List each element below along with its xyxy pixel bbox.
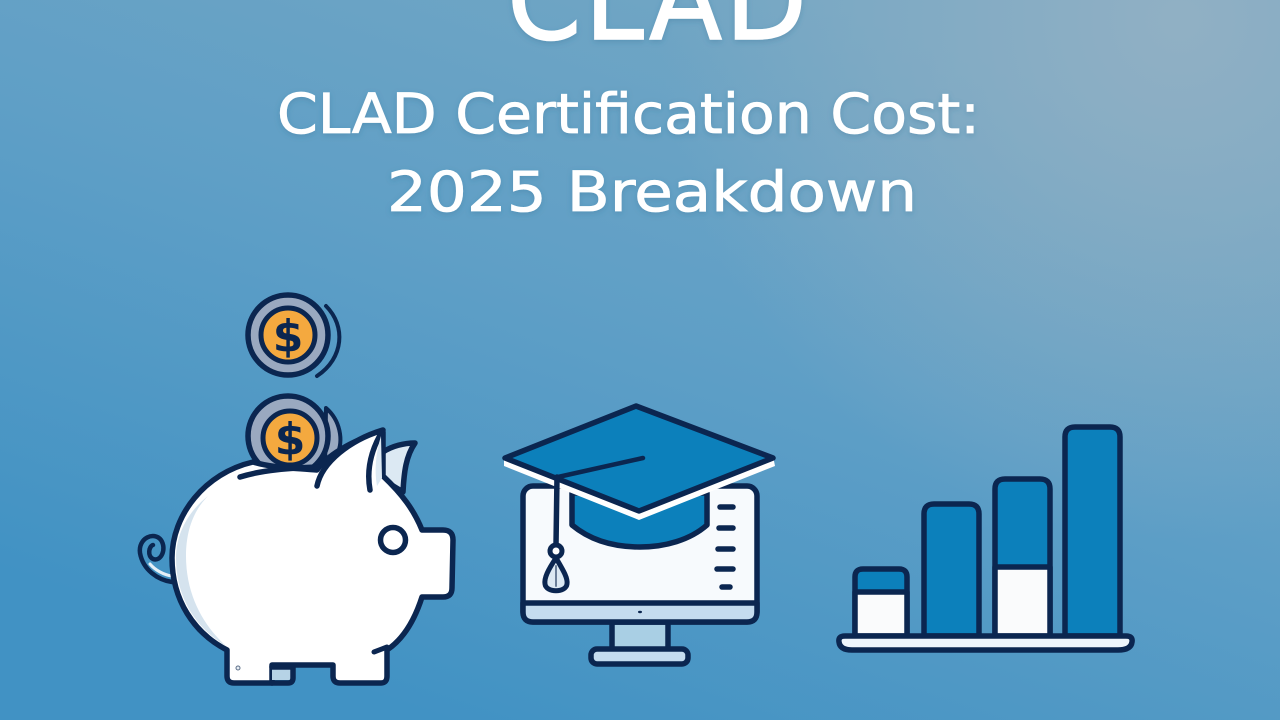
icon: falling coin xyxy=(248,295,339,376)
bar 3 xyxy=(995,479,1050,636)
subtitle xyxy=(277,82,980,224)
icon: cap base xyxy=(572,493,707,547)
bar 4 xyxy=(1065,427,1120,636)
subtitle: 2025 Breakdown xyxy=(387,160,917,224)
chart baseline shelf xyxy=(839,636,1132,650)
icon: near ear xyxy=(317,430,383,490)
icon: tassel xyxy=(545,477,567,591)
icon: pig tail xyxy=(140,536,172,582)
icon: monitor screen xyxy=(523,486,757,622)
icon: pig eye xyxy=(380,528,406,552)
icon: cap strap xyxy=(558,458,643,477)
icon: pig body xyxy=(172,432,453,683)
icon: coin entering slot xyxy=(248,396,340,476)
icon: monitor base xyxy=(591,649,688,664)
bar 1 xyxy=(855,569,907,636)
icon: monitor stand xyxy=(612,622,668,650)
icon: far ear xyxy=(380,443,415,492)
bar 2 xyxy=(924,504,979,636)
icon: coin slot xyxy=(240,467,318,477)
icon: piggy bank with coins xyxy=(140,295,453,683)
icon: cap board xyxy=(505,406,773,511)
subtitle: CLAD Certification Cost: xyxy=(277,82,980,146)
icon: monitor with graduation cap xyxy=(504,406,775,664)
bar chart icon xyxy=(839,427,1132,650)
icon: coin entering slot: $ xyxy=(275,414,305,465)
icon: screen dashes xyxy=(717,507,733,587)
icon: cap board underside xyxy=(504,456,775,520)
icon: falling coin: $ xyxy=(273,311,303,362)
icon: monitor chin xyxy=(523,603,757,622)
